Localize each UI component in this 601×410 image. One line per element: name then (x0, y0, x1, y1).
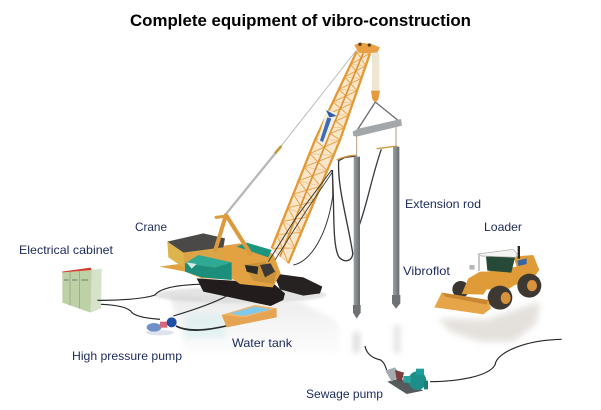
water tank (222, 305, 277, 327)
boom head (354, 43, 380, 53)
right hose (377, 146, 397, 149)
electrical cabinet (62, 268, 102, 313)
crane platform (159, 243, 281, 287)
pendant lines (226, 50, 357, 214)
crawler crane (153, 43, 380, 306)
label: crane: Crane (135, 220, 167, 234)
front wheel (488, 286, 512, 310)
ground reflection (170, 296, 400, 353)
spreader beam (353, 119, 402, 137)
boom logo band (317, 110, 337, 145)
left rod and vibroflot (353, 136, 361, 319)
boom lattice (272, 52, 370, 263)
title: Complete equipment of vibro-construction (130, 12, 471, 30)
front crawler track (197, 278, 285, 306)
sewage pump (385, 367, 428, 394)
loader (434, 246, 541, 342)
crane cab (243, 262, 277, 284)
hoist ropes and hook (371, 53, 380, 103)
sewage pump and hose (365, 339, 562, 394)
high pressure pump (146, 317, 177, 335)
crane shadow (153, 287, 327, 303)
label: vibroflot: Vibroflot (403, 264, 451, 278)
vibroflot assembly (332, 53, 402, 319)
label: water tank: Water tank (232, 336, 293, 350)
A-frame mast (215, 215, 251, 254)
rear crawler track (273, 273, 322, 296)
label: sewage pump: Sewage pump (306, 387, 383, 401)
right rod and vibroflot (392, 125, 400, 309)
label: high pressure pump: High pressure pump (72, 349, 182, 363)
sling (357, 102, 398, 130)
sewage hose (365, 339, 562, 382)
rear wheel (517, 274, 541, 298)
loader reflection (438, 302, 540, 342)
left hose (332, 156, 357, 261)
loader cab (469, 246, 527, 273)
rear far wheel (452, 281, 469, 298)
label: electrical cabinet: Electrical cabinet (19, 243, 114, 257)
power cables (97, 284, 230, 330)
label: extension rod: Extension rod (405, 197, 481, 211)
counterweight (167, 233, 225, 267)
hoses along boom (268, 170, 333, 265)
loader bucket (434, 293, 491, 314)
cables and high pressure pump (97, 284, 277, 335)
label: loader: Loader (484, 220, 522, 234)
teal machine housing (185, 243, 272, 280)
loader body (462, 255, 539, 295)
